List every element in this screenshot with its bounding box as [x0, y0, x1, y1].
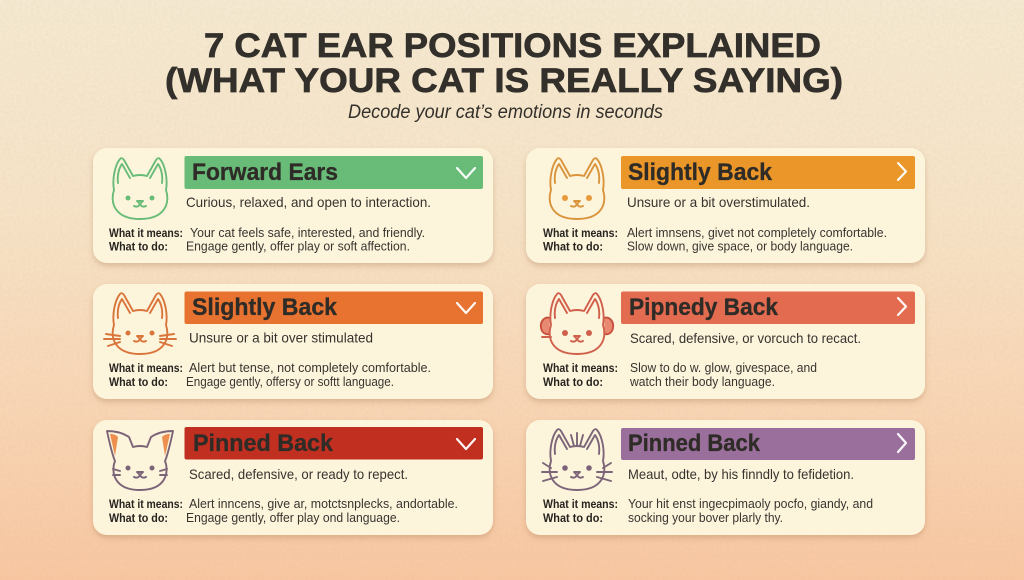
icon: cat with whiskers — [104, 293, 176, 354]
panel: slightly back amber — [526, 148, 925, 263]
description: Scared, defensive, or ready to repect. — [189, 466, 408, 482]
icon: amber cat — [550, 158, 604, 219]
description: Scared, defensive, or vorcuch to recact. — [630, 330, 861, 346]
panel: forward ears — [93, 148, 493, 263]
title: (WHAT YOUR CAT IS REALLY SAYING) — [165, 62, 843, 100]
description: Unsure or a bit over stimulated — [189, 330, 373, 346]
description: Unsure or a bit overstimulated. — [627, 194, 810, 210]
details: What to do: — [543, 377, 603, 389]
details: What to do: — [109, 242, 168, 254]
details — [109, 225, 425, 254]
details: Your hit enst ingecpimaoly pocfo, giandy, and — [628, 496, 873, 511]
heading bar: Pinned Back — [193, 430, 334, 457]
details: What to do: — [543, 513, 603, 525]
details: Slow to do w. glow, givespace, and — [630, 360, 817, 375]
details — [543, 360, 817, 389]
details: Alert but tense, not completely comfortable. — [189, 360, 431, 375]
heading bar: Slightly Back — [628, 159, 773, 186]
heading bar: Pinned Back — [628, 430, 761, 457]
title — [165, 27, 843, 100]
details: What it means: — [109, 363, 183, 375]
details: What to do: — [543, 242, 603, 254]
heading bar: Pipnedy Back — [629, 294, 779, 321]
details — [543, 496, 873, 525]
heading bar: Forward Ears — [192, 159, 338, 186]
icon: cat with side ears — [541, 293, 613, 354]
title: 7 CAT EAR POSITIONS EXPLAINED — [204, 27, 821, 65]
heading bar — [184, 292, 483, 324]
panel: pipnedy back coral — [526, 284, 925, 399]
subtitle: Decode your cat’s emotions in seconds — [348, 102, 663, 123]
details: What it means: — [543, 228, 618, 240]
details: Engage gently, offersy or softt language. — [186, 374, 394, 389]
details: What to do: — [109, 377, 168, 389]
details: Alert inncens, give ar, motctsnplecks, andortable. — [189, 496, 458, 511]
details — [109, 360, 431, 389]
heading bar: Slightly Back — [192, 294, 338, 321]
details: socking your bover plarly thy. — [628, 510, 783, 525]
details: What it means: — [109, 499, 183, 511]
details: Engage gently, offer play ond language. — [186, 510, 400, 525]
details: What it means: — [543, 499, 618, 511]
heading bar — [184, 156, 483, 189]
details: Engage gently, offer play or soft affection. — [186, 238, 410, 254]
details: What it means: — [543, 363, 618, 375]
details: What it means: — [109, 228, 183, 240]
details: What to do: — [109, 513, 168, 525]
description: Meaut, odte, by his finndly to fefidetion. — [628, 466, 854, 482]
panel: slightly back orange — [93, 284, 493, 399]
icon: cat with forward ears — [113, 158, 167, 219]
panel: pinned back red — [93, 420, 493, 535]
heading bar — [184, 427, 483, 460]
heading bar — [621, 292, 915, 324]
heading bar — [621, 428, 915, 460]
heading bar — [621, 156, 915, 189]
icon: cat with tension lines — [542, 429, 612, 490]
icon: cat with flattened ears — [107, 431, 173, 490]
details — [543, 225, 887, 254]
panel: pinned back purple — [526, 420, 925, 535]
description: Curious, relaxed, and open to interaction. — [186, 194, 431, 210]
details: Slow down, give space, or body language. — [627, 238, 853, 254]
details: Your cat feels safe, interested, and friendly. — [190, 225, 425, 240]
details: watch their body language. — [629, 374, 775, 389]
details: Alert imnsens, givet not completely comfortable. — [627, 225, 887, 240]
details — [109, 496, 458, 525]
